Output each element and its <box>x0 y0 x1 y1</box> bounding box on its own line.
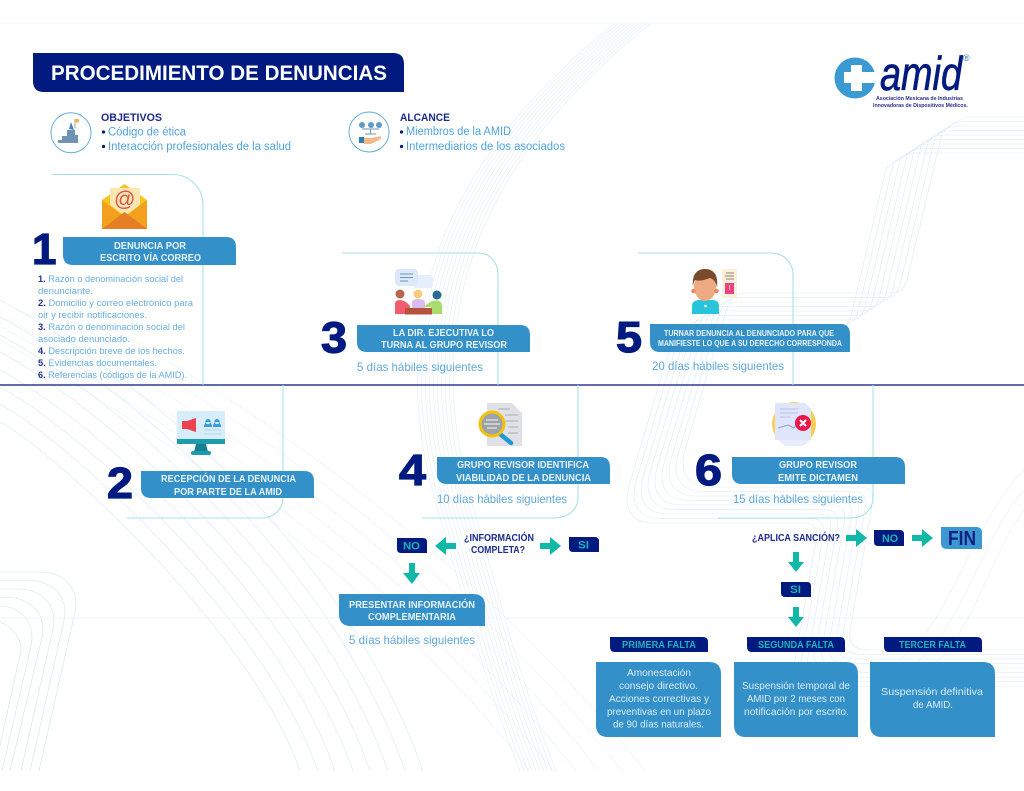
step heading: TURNAR DENUNCIA AL DENUNCIADO PARA QUE <box>664 328 834 338</box>
icon: person with notice <box>691 269 737 314</box>
decision: información completa <box>397 531 599 584</box>
panel: step 6 <box>695 385 905 518</box>
deadline: 15 días hábiles siguientes <box>733 492 863 506</box>
logo: AMID: amid <box>880 47 963 100</box>
tag: SI <box>781 582 811 597</box>
panel: presentar información complementaria <box>339 594 485 647</box>
step heading: POR PARTE DE LA AMID <box>174 487 282 498</box>
panel: step 2 <box>107 385 314 518</box>
box: FIN: FIN <box>948 528 976 550</box>
panel: primera falta <box>596 637 721 737</box>
arrow: down to sanctions <box>788 607 804 627</box>
logo: AMID <box>834 47 970 109</box>
icon: document and magnifier <box>480 403 522 446</box>
requirements list: 6. Referencias (códigos de la AMID). <box>38 370 187 381</box>
alcance block: Intermediarios de los asociados <box>406 141 565 153</box>
objetivos block: Código de ética <box>108 126 187 138</box>
icon: goal flag on steps <box>51 113 91 153</box>
deadline: 5 días hábiles siguientes <box>349 633 475 647</box>
step number 5: 5 <box>616 313 642 362</box>
alcance block: Miembros de la AMID <box>406 126 511 138</box>
decision: aplica sanción <box>752 527 982 627</box>
panel: presentar información complementaria: PRESENTAR INFORMACIÓN <box>349 598 475 611</box>
step heading: TURNA AL GRUPO REVISOR <box>381 340 508 351</box>
panel: step 1 <box>32 174 236 385</box>
icon: monitor with megaphone <box>177 411 225 455</box>
deadline: 20 días hábiles siguientes <box>652 359 784 373</box>
step heading: GRUPO REVISOR <box>779 460 858 471</box>
step number 6: 6 <box>695 446 722 495</box>
tag: NO <box>397 538 427 553</box>
tag: NO <box>874 530 904 546</box>
sanction description: Amonestación <box>627 667 691 679</box>
objetivos block <box>51 112 291 153</box>
decision: información completa: ¿INFORMACIÓN <box>464 531 534 544</box>
panel: tercer falta <box>870 637 995 737</box>
tab: SEGUNDA FALTA <box>758 640 834 651</box>
icon: rejected report <box>772 402 816 446</box>
deadline: 5 días hábiles siguientes <box>357 360 483 374</box>
arrow: down to complementary info <box>403 563 420 584</box>
requirements list: denunciante. <box>38 286 93 297</box>
sanction description: consejo directivo. <box>619 680 698 692</box>
sanction description: de AMID. <box>913 699 953 711</box>
step heading: EMITE DICTAMEN <box>778 473 858 484</box>
sanction description <box>870 662 995 737</box>
sanction description: preventivas en un plazo <box>607 706 711 718</box>
panel: step 3 <box>321 253 530 385</box>
tag: NO: NO <box>403 540 420 552</box>
tab: TERCER FALTA <box>899 640 966 651</box>
step heading: RECEPCIÓN DE LA DENUNCIA <box>161 472 296 485</box>
requirements list <box>38 274 194 381</box>
sanction description: Acciones correctivas y <box>609 693 710 705</box>
objetivos block: Interacción profesionales de la salud <box>108 141 291 153</box>
step heading <box>141 471 314 498</box>
step number 2: 2 <box>107 459 133 508</box>
panel: step 4 <box>399 385 610 518</box>
tag: SI <box>569 537 599 552</box>
requirements list: 4. Descripción breve de los hechos. <box>38 346 185 357</box>
center divider line <box>0 384 1024 386</box>
step heading: ESCRITO VÍA CORREO <box>100 251 201 264</box>
arrow: right to SI <box>540 537 561 555</box>
objetivos block: OBJETIVOS <box>101 112 162 124</box>
title <box>33 53 404 92</box>
deadline: 10 días hábiles siguientes <box>437 492 567 506</box>
step heading: VIABILIDAD DE LA DENUNCIA <box>456 473 591 484</box>
sanction description: notificación por escrito. <box>744 706 849 718</box>
step heading <box>357 325 530 352</box>
alcance block <box>349 112 565 153</box>
step heading: MANIFIESTE LO QUE A SU DERECHO CORRESPONDA <box>658 338 842 348</box>
sanction description: Suspensión definitiva <box>881 686 983 698</box>
arrow: right to FIN <box>912 529 933 547</box>
step heading <box>732 457 905 484</box>
sanction description <box>734 662 858 737</box>
logo: AMID: ® <box>963 53 970 63</box>
sanction description: AMID por 2 meses con <box>747 693 845 705</box>
sanction description <box>596 662 721 737</box>
arrow: right to NO <box>846 529 867 547</box>
decision: información completa: COMPLETA? <box>471 545 525 556</box>
panel: segunda falta <box>734 637 858 737</box>
title: PROCEDIMIENTO DE DENUNCIAS <box>51 62 387 85</box>
arrow: left to NO <box>435 537 456 555</box>
step heading <box>63 237 236 265</box>
requirements list: 5. Evidencias documentales. <box>38 358 157 369</box>
sanction description: de 90 días naturales. <box>613 718 704 730</box>
decision: aplica sanción: ¿APLICA SANCIÓN? <box>752 531 840 544</box>
icon: team meeting <box>395 269 442 314</box>
step number 4: 4 <box>399 446 427 495</box>
icon: envelope: @ <box>114 188 135 211</box>
step number 1: 1 <box>32 225 56 274</box>
sanction description: Suspensión temporal de <box>742 680 850 692</box>
alcance block: ALCANCE <box>400 112 450 124</box>
step heading <box>650 324 850 352</box>
tag: SI: SI <box>578 540 589 552</box>
panel: step 5 <box>616 253 850 385</box>
tag: SI: SI <box>790 584 801 596</box>
requirements list: oir y recibir notificaciones. <box>38 310 147 321</box>
logo: AMID: Innovadoras de Dispositivos Médicos. <box>873 103 968 109</box>
icon: envelope <box>102 184 147 229</box>
step heading: GRUPO REVISOR IDENTIFICA <box>457 460 589 471</box>
requirements list: 3. Razón o denominación social del <box>38 322 185 333</box>
step heading <box>437 457 610 484</box>
step number 3: 3 <box>321 314 347 362</box>
requirements list: 1. Razón o denominación social del <box>38 274 183 285</box>
tag: NO: NO <box>882 533 898 545</box>
logo: AMID: Asociación Mexicana de Industrias <box>876 96 963 102</box>
icon: hand holding network <box>349 112 389 152</box>
step heading: LA DIR. EJECUTIVA LO <box>393 328 494 339</box>
requirements list: asociado denunciado. <box>38 334 130 345</box>
requirements list: 2. Domicilio y correo electrónico para <box>38 298 194 309</box>
panel: presentar información complementaria: COMPLEMENTARIA <box>368 612 456 623</box>
arrow: down to SI <box>788 552 804 572</box>
step heading: DENUNCIA POR <box>114 241 187 252</box>
tab: PRIMERA FALTA <box>622 640 696 651</box>
